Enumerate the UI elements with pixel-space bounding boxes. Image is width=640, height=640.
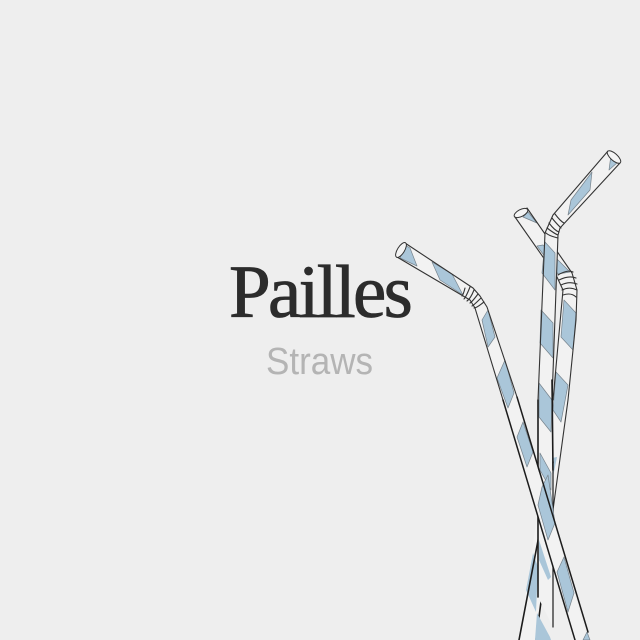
opening — [513, 206, 529, 220]
straw: middle (behind) — [513, 206, 577, 640]
title: Pailles: Pailles — [229, 251, 411, 334]
straw: left — [394, 241, 590, 640]
opening — [394, 241, 408, 259]
straw: tall right — [535, 149, 623, 640]
illustration: three striped straws — [394, 149, 623, 640]
opening — [605, 149, 623, 165]
subtitle: Straws: Straws — [266, 341, 373, 383]
